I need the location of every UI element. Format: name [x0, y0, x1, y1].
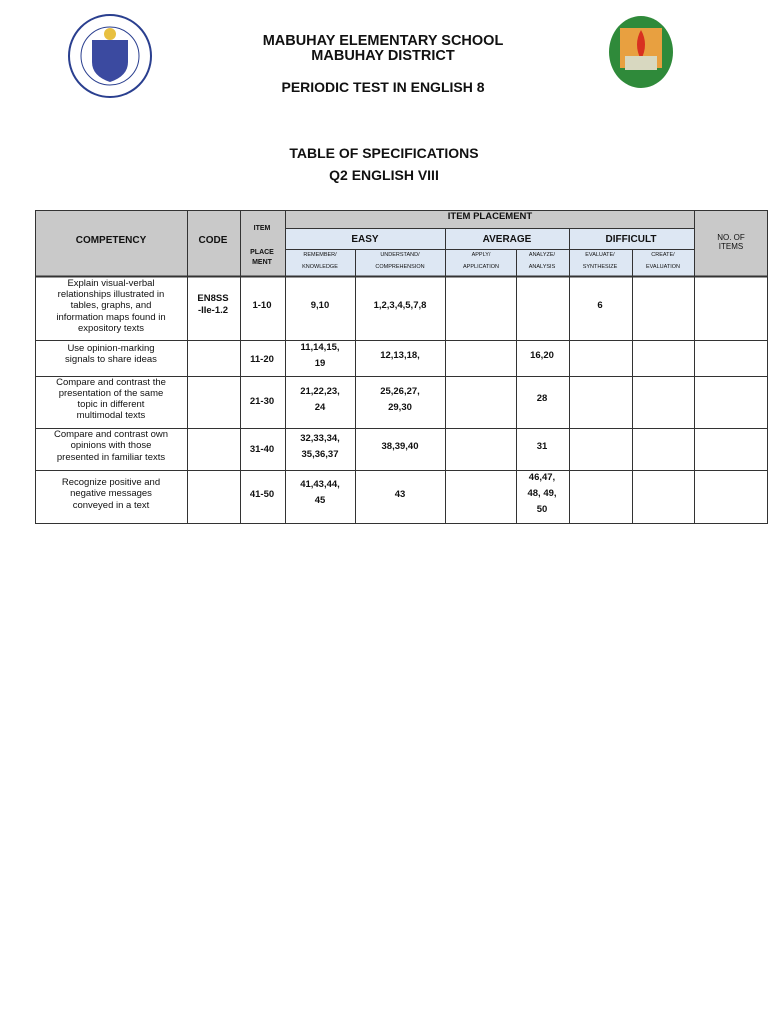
table of specifications: DIFFICULT [606, 234, 656, 245]
table of specifications: SYNTHESIZE [583, 264, 618, 270]
table of specifications: 43 [395, 489, 405, 500]
table of specifications: 45 [315, 495, 326, 506]
table of specifications: 31-40 [250, 444, 274, 455]
title block: MABUHAY DISTRICT [311, 48, 455, 64]
table of specifications: EN8SS [197, 293, 229, 304]
table of specifications: 38,39,40 [382, 441, 418, 452]
table of specifications: 21-30 [250, 396, 274, 407]
table of specifications: 35,36,37 [302, 449, 338, 460]
table of specifications: CODE [199, 235, 228, 246]
table of specifications: 48, 49, [527, 488, 557, 499]
table of specifications: 25,26,27, [380, 386, 420, 397]
table of specifications: 41-50 [250, 489, 274, 500]
table of specifications: 11,14,15, [300, 342, 340, 353]
table of specifications: 19 [315, 358, 325, 369]
title block [263, 33, 503, 183]
table of specifications: relationships illustrated in [58, 289, 164, 300]
table of specifications: 16,20 [530, 350, 554, 361]
table of specifications: negative messages [70, 488, 152, 499]
table of specifications [35, 210, 768, 524]
table of specifications: 31 [537, 441, 548, 452]
title block: Q2 ENGLISH VIII [329, 167, 439, 183]
logo: school seal [609, 16, 673, 88]
table of specifications: EASY [351, 234, 379, 245]
table of specifications: 46,47, [529, 472, 555, 483]
table of specifications: CREATE/ [651, 252, 675, 258]
table of specifications: 32,33,34, [300, 433, 340, 444]
table of specifications: EVALUATE/ [585, 252, 615, 258]
table of specifications: ITEM [254, 225, 271, 232]
table of specifications: 11-20 [250, 354, 274, 365]
title block: TABLE OF SPECIFICATIONS [289, 145, 479, 161]
table of specifications: 24 [315, 402, 326, 413]
table of specifications: tables, graphs, and [71, 300, 151, 311]
table of specifications: Compare and contrast own [54, 429, 168, 440]
table of specifications: EVALUATION [646, 264, 680, 270]
table of specifications: signals to share ideas [65, 354, 157, 365]
table of specifications: topic in different [78, 399, 145, 410]
table of specifications: AVERAGE [483, 234, 532, 245]
table of specifications: information maps found in [56, 312, 166, 323]
table of specifications: 6 [597, 300, 603, 311]
logo: DepEd seal [69, 15, 151, 97]
table of specifications: conveyed in a text [73, 500, 150, 511]
table of specifications: expository texts [78, 323, 144, 334]
table of specifications: ANALYZE/ [529, 252, 556, 258]
table of specifications: -IIe-1.2 [198, 305, 228, 316]
table of specifications: APPLICATION [463, 264, 499, 270]
table of specifications: COMPREHENSION [375, 264, 425, 270]
table of specifications: Compare and contrast the [56, 377, 166, 388]
table of specifications: 21,22,23, [300, 386, 340, 397]
table of specifications: APPLY/ [472, 252, 491, 258]
table of specifications: 1,2,3,4,5,7,8 [374, 300, 426, 311]
table of specifications: 12,13,18, [380, 350, 420, 361]
table of specifications: Explain visual-verbal [67, 278, 155, 289]
table of specifications: 29,30 [388, 402, 412, 413]
table of specifications: UNDERSTAND/ [380, 252, 420, 258]
table of specifications: multimodal texts [77, 410, 146, 421]
table of specifications: COMPETENCY [76, 235, 147, 246]
table of specifications: 50 [537, 504, 547, 515]
table of specifications: PLACE [250, 249, 274, 256]
table of specifications: 1-10 [252, 300, 272, 311]
table of specifications: 28 [537, 393, 547, 404]
table of specifications: 41,43,44, [300, 479, 340, 490]
table of specifications: REMEMBER/ [303, 252, 337, 258]
table of specifications: Recognize positive and [62, 477, 160, 488]
table of specifications: ITEM PLACEMENT [448, 211, 532, 222]
table of specifications: MENT [252, 259, 273, 266]
table of specifications: 9,10 [311, 300, 329, 311]
table of specifications: presented in familiar texts [57, 452, 165, 463]
title block: MABUHAY ELEMENTARY SCHOOL [263, 33, 503, 49]
table of specifications: opinions with those [71, 440, 151, 451]
table of specifications: NO. OF [717, 233, 745, 242]
table of specifications: Use opinion-marking [67, 343, 155, 354]
table of specifications: KNOWLEDGE [302, 264, 338, 270]
table of specifications: ITEMS [719, 242, 743, 251]
title block: PERIODIC TEST IN ENGLISH 8 [281, 79, 485, 95]
table of specifications: ANALYSIS [529, 264, 556, 270]
table of specifications: presentation of the same [59, 388, 163, 399]
